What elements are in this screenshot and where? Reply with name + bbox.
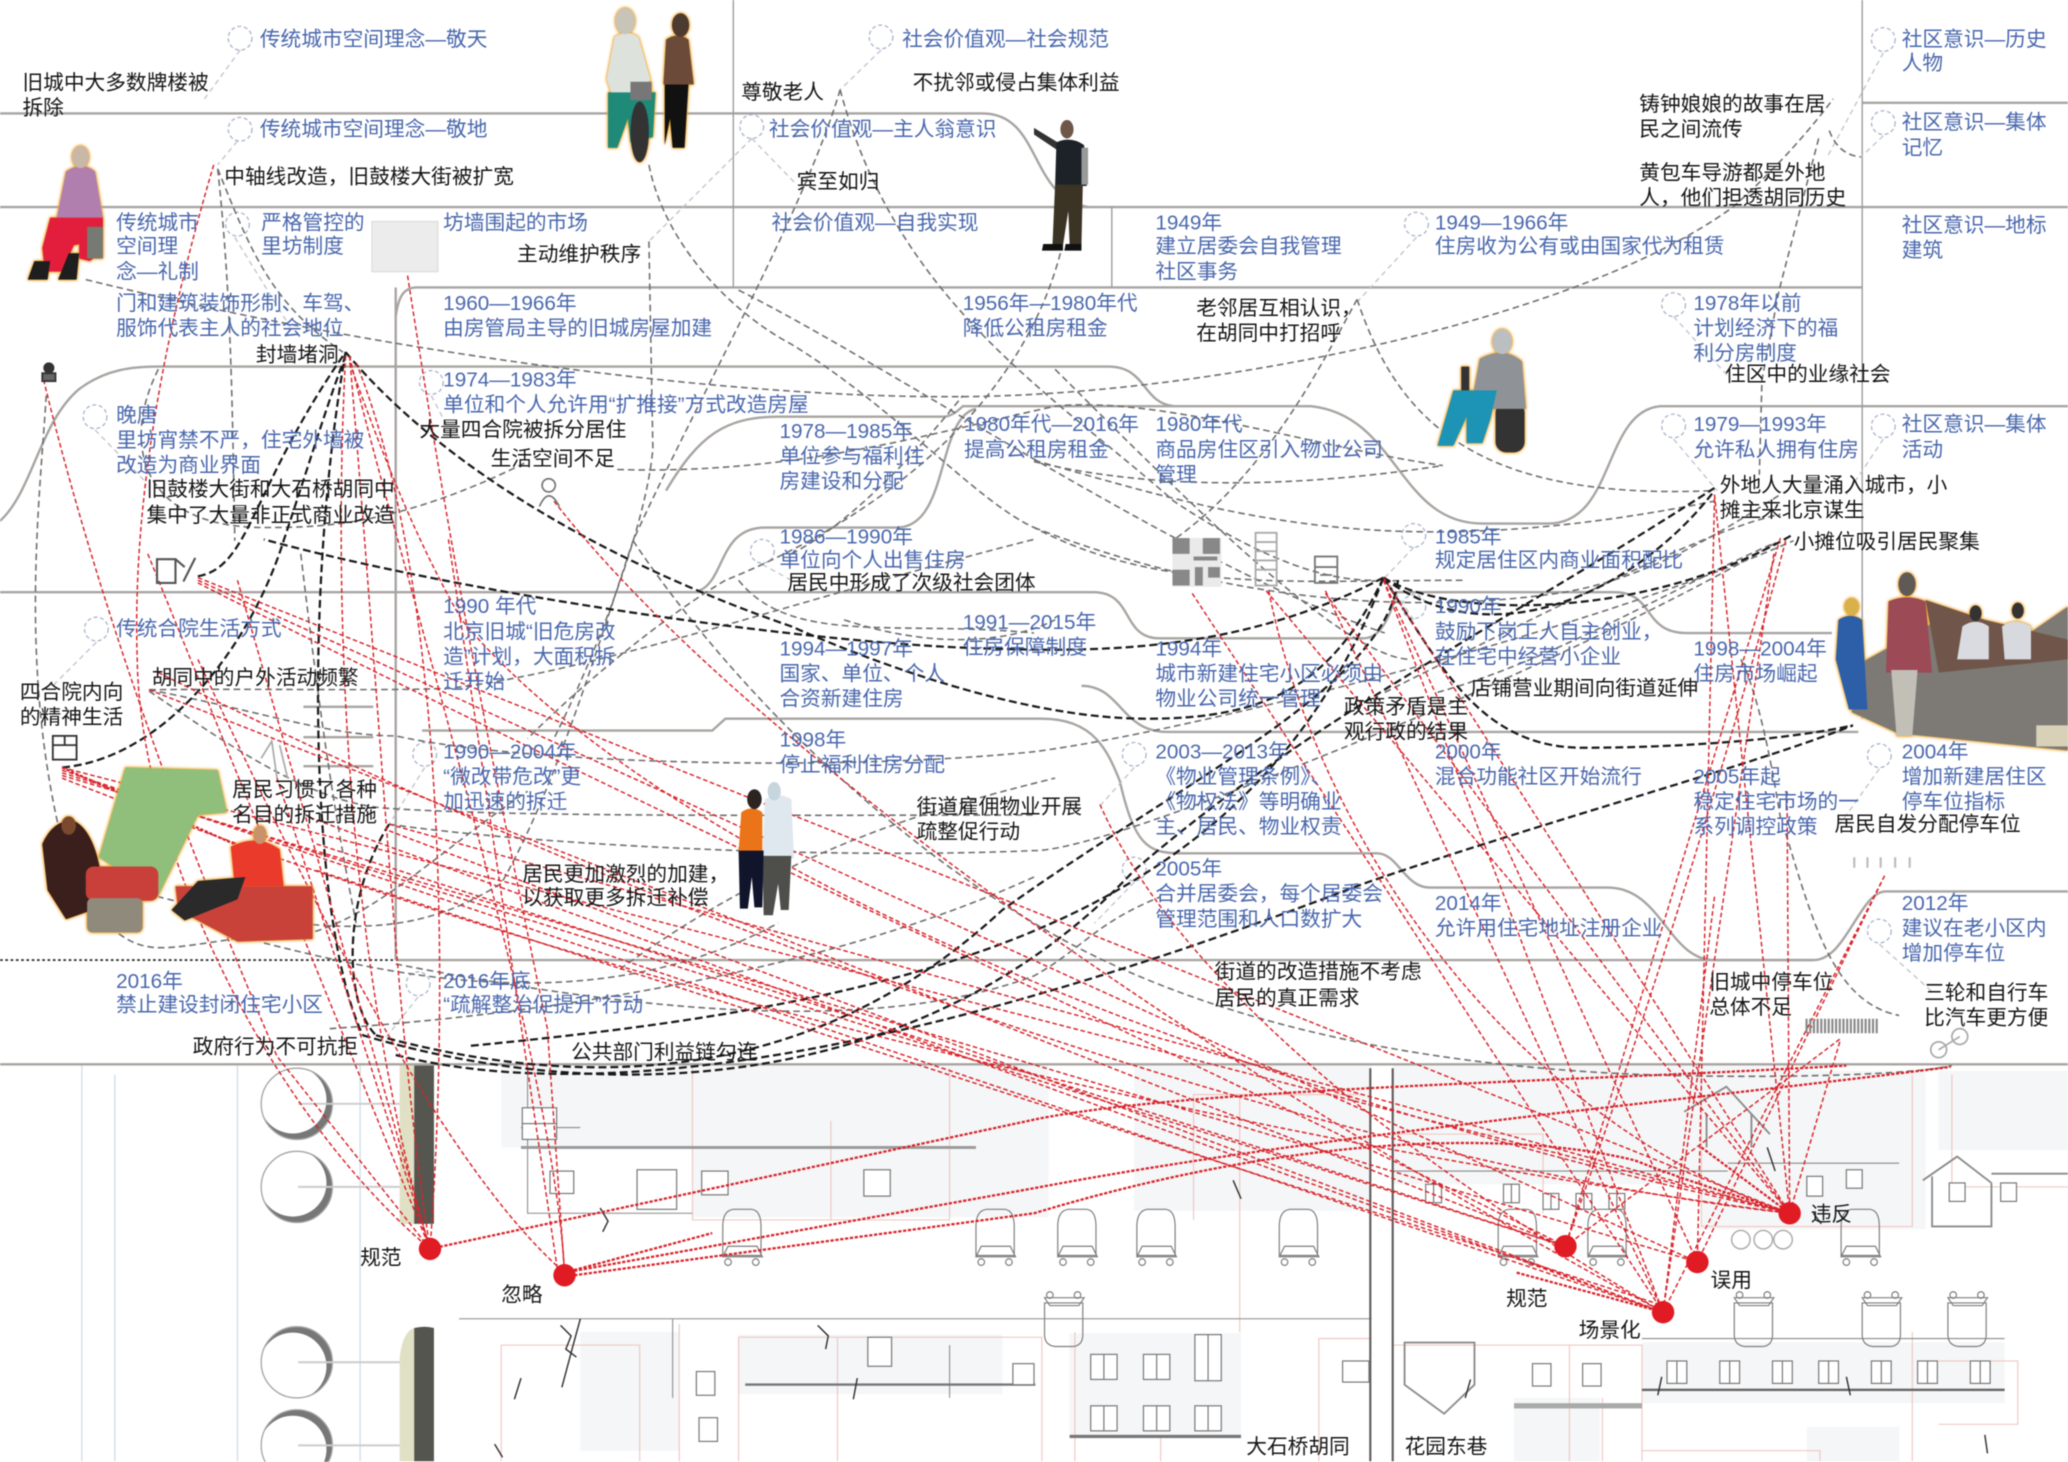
blue entry: 2003—2013年: 《物业管理条例》、 — [1155, 765, 1331, 788]
blue entry: 1980年代: 商品房住区引入物业公司 — [1155, 438, 1383, 461]
blue entry: 门和建筑装饰形制: 门和建筑装饰形制、车驾、 — [116, 292, 364, 315]
blue entry: 2003—2013年: 2003—2013年 — [1155, 740, 1289, 763]
blue entry: 1985年: 规定居住区内商业面积配比 — [1435, 549, 1683, 572]
note: 黄包车导游: 黄包车导游都是外地 — [1639, 161, 1826, 184]
blue entry: 1979—1993年: 1979—1993年 — [1693, 413, 1827, 436]
note: 拆迁措施: 居民习惯了各种 — [232, 779, 377, 802]
icon: faded wall rectangle — [372, 222, 438, 272]
icon: tick row — [1854, 857, 1910, 868]
blue entry: 2016年: 2016年 — [116, 970, 183, 993]
icon: document and pencil — [157, 558, 195, 583]
blue entry: 2012年: 建议在老小区内 — [1902, 917, 2047, 940]
blue entry: 社区意识—集体记忆: 社区意识—集体 — [1902, 111, 2047, 134]
blue entry: 1994年: 物业公司统一管理 — [1155, 688, 1321, 711]
blue entry: 1980年代: 管理 — [1155, 463, 1197, 486]
blue entry: 1990年: 鼓励下岗工人自主创业， — [1435, 620, 1662, 643]
photo: couple standing — [739, 782, 794, 915]
blue entry: 1990年代: 造”计划，大面积拆 — [443, 645, 616, 668]
note: 外地人涌入: 摊主来北京谋生 — [1720, 499, 1865, 522]
blue entry: 1974—1983年: 1974—1983年 — [443, 368, 577, 391]
blue entry: 晚唐: 改造为商业界面 — [116, 454, 261, 477]
note: 店铺延伸: 店铺营业期间向街道延伸 — [1471, 677, 1698, 700]
blue entry: 1990年代: 迁开始 — [443, 670, 506, 693]
blue entry: 晚唐: 里坊宵禁不严，住宅外墙被 — [116, 429, 364, 452]
blue entry: 传统城市空间理念—礼制: 传统城市 — [116, 211, 199, 234]
black dashed links — [62, 352, 1853, 1075]
blue entry: 门和建筑装饰形制: 服饰代表主人的社会地位 — [116, 317, 344, 340]
grey dashed links — [35, 90, 1952, 1076]
icon: QR code — [1172, 538, 1221, 587]
blue entry: 1994年: 城市新建住宅小区必须由 — [1155, 662, 1383, 685]
blue entry: 传统合院生活方式: 传统合院生活方式 — [116, 618, 282, 641]
blue entry: 社区意识—地标建筑: 建筑 — [1902, 239, 1943, 262]
blue entry: 社区意识—历史人物: 社区意识—历史 — [1902, 28, 2047, 51]
blue entry: 2003—2013年: 主、居民、物业权责 — [1155, 815, 1342, 838]
note: 生活空间不足: 生活空间不足 — [491, 448, 615, 471]
timeline lanes and dividers — [0, 0, 2068, 1064]
node label: 忽略: 忽略 — [501, 1284, 543, 1307]
note: 三轮和自行车: 比汽车更方便 — [1924, 1007, 2049, 1030]
blue entry: 1974—1983年: 单位和个人允许用“扩推接”方式改造房屋 — [443, 393, 809, 416]
blue entry: 2000年: 混合功能社区开始流行 — [1435, 765, 1642, 788]
blue entry: 社区意识—集体活动: 活动 — [1902, 438, 1943, 461]
blue entry: 社区意识—地标建筑: 社区意识—地标 — [1902, 214, 2047, 237]
blue entry: 2016年底: 2016年底 — [443, 970, 531, 993]
blue entry: 2004年: 2004年 — [1902, 740, 1968, 763]
panel: building elevation strip — [82, 1064, 2068, 1462]
red node: 规范 right — [1554, 1235, 1577, 1257]
house gables — [1405, 1087, 2068, 1414]
note: 街道雇佣物业: 街道雇佣物业开展 — [917, 796, 1082, 819]
blue entry: 1990年代: 1990 年代 — [443, 595, 537, 618]
icon: trees — [259, 1066, 415, 1462]
blue entry: 主人翁意识: 社会价值观—主人翁意识 — [769, 118, 997, 141]
note: 拆迁措施: 名目的拆迁措施 — [232, 804, 377, 827]
note: 停车位不足: 旧城中停车位 — [1709, 971, 1833, 994]
street label: 花园东巷: 花园东巷 — [1405, 1435, 1488, 1458]
blue entry: 1990年代: 北京旧城“旧危房改 — [443, 620, 616, 643]
note: 街道雇佣物业: 疏整促行动 — [917, 821, 1020, 844]
blue entry: 2004年: 增加新建居住区 — [1902, 765, 2047, 788]
red dashed links — [44, 165, 1951, 1312]
icon: small person — [539, 479, 559, 506]
blue entry: 2005年起: 稳定住宅市场的一 — [1693, 790, 1859, 813]
red node: 场景化 — [1652, 1301, 1674, 1323]
icon: vans lower row — [1045, 1292, 1987, 1346]
note: 停车位不足: 总体不足 — [1709, 996, 1792, 1019]
note: 封墙堵洞: 封墙堵洞 — [256, 343, 339, 366]
blue entry: 2000年: 2000年 — [1435, 740, 1502, 763]
red node: 规范 left — [419, 1238, 441, 1260]
photo: man in wheelchair — [1438, 329, 1526, 452]
blue entry: 2012年: 2012年 — [1902, 892, 1968, 915]
note: 非正式商业改造: 集中了大量非正式商业改造 — [146, 504, 395, 527]
icon: barcode — [1805, 1021, 1879, 1032]
red node: 忽略 — [553, 1264, 576, 1286]
icon: bicycle — [1931, 1029, 1968, 1058]
note: 中轴线改造: 中轴线改造，旧鼓楼大街被扩宽 — [224, 165, 514, 188]
blue entry: 1986—1990年: 单位向个人出售住房 — [779, 549, 966, 572]
street label: 大石桥胡同: 大石桥胡同 — [1246, 1435, 1350, 1458]
blue entry: 1960—1966年: 由房管局主导的旧城房屋加建 — [443, 317, 712, 340]
note: 非正式商业改造: 旧鼓楼大街和大石桥胡同中 — [146, 478, 395, 501]
blue entry: 1990年: 在住宅中经营小企业 — [1435, 645, 1621, 668]
blue entry: 1994—1997年: 合资新建住房 — [779, 688, 904, 711]
icon: window — [53, 736, 77, 760]
blue entry: 2005年起: 系列调控政策 — [1693, 815, 1818, 838]
blue entry: 传统城市空间理念—礼制: 念—礼制 — [116, 259, 199, 283]
icon: sign box — [1315, 557, 1337, 583]
blue entry: 1949年: 社区事务 — [1155, 260, 1238, 283]
node label: 场景化: 场景化 — [1579, 1319, 1641, 1342]
note: 三轮和自行车: 三轮和自行车 — [1924, 982, 2048, 1005]
icon: walker — [261, 741, 288, 778]
note: 小摊位: 小摊位吸引居民聚集 — [1794, 531, 1980, 554]
icon: vans upper row — [723, 1209, 1881, 1265]
blue entry: 1985年: 1985年 — [1435, 525, 1502, 548]
blue entry: 1956年—1980年代: 1956年—1980年代 — [963, 292, 1138, 315]
blue entry: 1998年: 停止福利住房分配 — [779, 753, 945, 776]
blue entry: 1998—2004年: 住房市场崛起 — [1693, 662, 1818, 685]
blue entry: 2004年: 停车位指标 — [1902, 790, 2005, 813]
note: 宾至如归: 宾至如归 — [797, 171, 879, 194]
note: 尊敬老人: 尊敬老人 — [741, 81, 824, 104]
blue entry: 1994—1997年: 国家、单位、个人 — [779, 662, 945, 685]
note: 次级社会团体: 居民中形成了次级社会团体 — [787, 571, 1036, 594]
note: 铸钟娘娘: 铸钟娘娘的故事在居 — [1639, 93, 1826, 116]
note: 老邻居: 在胡同中打招呼 — [1196, 322, 1341, 345]
blue entry: 1949—1966年: 1949—1966年 — [1435, 211, 1568, 234]
blue entry: 坊墙围起的市场: 坊墙围起的市场 — [443, 211, 588, 234]
blue entry: 1978年以前: 1978年以前 — [1693, 292, 1801, 315]
blue entry: 1991—2015年: 1991—2015年 — [963, 611, 1096, 634]
note: 外地人涌入: 外地人大量涌入城市，小 — [1720, 474, 1948, 497]
node label: 误用: 误用 — [1711, 1269, 1752, 1292]
blue entry: 1978—1985年: 单位参与福利住 — [779, 445, 924, 468]
photo: seated woman in pink — [28, 146, 103, 280]
blue entry: 1994年: 1994年 — [1155, 637, 1222, 660]
node label: 违反: 违反 — [1811, 1203, 1852, 1226]
blue entry: 社区意识—历史人物: 人物 — [1902, 52, 1943, 75]
blue entry: 1994—1997年: 1994—1997年 — [779, 637, 913, 660]
blue entry: 1949年: 建立居委会自我管理 — [1155, 235, 1342, 258]
blue entry: 严格管控的里坊制度: 里坊制度 — [261, 235, 344, 258]
icon: pedestrians and bikes — [495, 1147, 1987, 1457]
blue entry: 1978—1985年: 1978—1985年 — [779, 420, 913, 443]
note: 公共部门: 公共部门利益链勾连 — [571, 1041, 758, 1064]
photo: two elders with bicycle — [607, 8, 694, 162]
blue entry: 1990—2004年: 1990—2004年 — [443, 740, 577, 763]
blue entry: 传统城市空间理念—礼制: 空间理 — [116, 235, 178, 258]
note: 激烈加建: 以获取更多拆迁补偿 — [522, 887, 709, 910]
note: 精神生活: 四合院内向 — [20, 681, 123, 704]
note: 改造措施: 居民的真正需求 — [1215, 987, 1360, 1010]
blue entry: 1978—1985年: 房建设和分配 — [779, 470, 904, 493]
blue entry: 自我实现: 社会价值观—自我实现 — [772, 211, 978, 234]
blue entry: 1980年代: 1980年代 — [1155, 413, 1243, 436]
red node: 误用 — [1686, 1251, 1709, 1273]
dashed circle markers — [53, 25, 1932, 1042]
note: 改造措施: 街道的改造措施不考虑 — [1215, 961, 1422, 984]
blue entry: 2016年底: “疏解整治促提升”行动 — [443, 994, 643, 1017]
blue entry: 1990年: 1990年 — [1435, 595, 1502, 618]
blue entry: 社会规范: 社会价值观—社会规范 — [902, 28, 1109, 51]
node label: 规范 left: 规范 — [360, 1247, 401, 1270]
note: 激烈加建: 居民更加激烈的加建， — [522, 863, 729, 886]
note: 政策矛盾: 政策矛盾是主 — [1344, 695, 1468, 718]
blue entry: 1986—1990年: 1986—1990年 — [779, 525, 913, 548]
blue entry: 1980年代—2016年: 提高公租房租金 — [964, 438, 1109, 461]
note: 老邻居: 老邻居互相认识， — [1196, 297, 1362, 320]
note: 政府行为: 政府行为不可抗拒 — [193, 1036, 358, 1059]
blue entry: 1978年以前: 计划经济下的福 — [1693, 317, 1838, 340]
blue entry: 2012年: 增加停车位 — [1902, 942, 2005, 965]
note: 精神生活: 的精神生活 — [20, 706, 123, 729]
street dividers — [1370, 1068, 1393, 1461]
note: 政策矛盾: 观行政的结果 — [1344, 721, 1468, 744]
blue entry: 1956年—1980年代: 降低公租房租金 — [963, 317, 1108, 340]
blue entry: 1949年: 1949年 — [1155, 211, 1222, 234]
blue entry: 1978年以前: 利分房制度 — [1693, 342, 1797, 365]
blue entry: 1998年: 1998年 — [779, 728, 846, 751]
blue entry: 2014年: 2014年 — [1435, 892, 1502, 915]
note: 主动维护秩序: 主动维护秩序 — [517, 243, 641, 266]
photo: residents on red sofas with map — [42, 768, 313, 942]
blue entry: 晚唐: 晚唐 — [116, 404, 158, 427]
blue entry: 2016年: 禁止建设封闭住宅小区 — [116, 994, 323, 1017]
icon: lantern person — [42, 363, 55, 381]
blue entry: 1980年代—2016年: 1980年代—2016年 — [964, 413, 1139, 436]
red node: 违反 — [1778, 1202, 1801, 1224]
photo: man pointing — [1034, 120, 1088, 251]
note: 四合院被拆分: 大量四合院被拆分居住 — [419, 419, 626, 442]
photo: workers on site — [1836, 572, 2068, 750]
note: 业缘社会: 住区中的业缘社会 — [1725, 363, 1891, 386]
note: 牌楼被拆除: 拆除 — [22, 97, 64, 120]
blue entry: 1998—2004年: 1998—2004年 — [1693, 637, 1827, 660]
blue entry: 1949—1966年: 住房收为公有或由国家代为租赁 — [1435, 235, 1725, 258]
note: 牌楼被拆除: 旧城中大多数牌楼被 — [22, 72, 209, 95]
note: 自发分配停车位: 居民自发分配停车位 — [1834, 813, 2021, 836]
blue entry: 严格管控的里坊制度: 严格管控的 — [261, 211, 365, 234]
note: 铸钟娘娘: 民之间流传 — [1639, 118, 1743, 141]
blue entry: 1990—2004年: “微改带危改”更 — [443, 765, 581, 788]
windows — [522, 1108, 2016, 1441]
node label: 规范 right: 规范 — [1506, 1288, 1548, 1311]
blue entry: 社区意识—集体活动: 社区意识—集体 — [1902, 413, 2047, 436]
blue entry: 传统城市空间理念—敬天: 传统城市空间理念—敬天 — [260, 27, 487, 51]
blue entry: 1979—1993年: 允许私人拥有住房 — [1693, 438, 1859, 461]
note: 户外活动: 胡同中的户外活动频繁 — [152, 666, 359, 689]
blue entry: 1991—2015年: 住房保障制度 — [963, 636, 1087, 659]
icon: ladder — [1256, 533, 1277, 586]
blue entry: 社区意识—集体记忆: 记忆 — [1902, 136, 1943, 159]
blue entry: 2005年起: 2005年起 — [1693, 765, 1781, 788]
dark wall strips — [400, 1066, 434, 1461]
blue entry: 2005年: 合并居委会，每个居委会 — [1155, 883, 1383, 906]
blue entry: 2005年: 管理范围和人口数扩大 — [1155, 908, 1362, 931]
blue entry: 2003—2013年: 《物权法》等明确业 — [1155, 790, 1342, 813]
blue entry: 2005年: 2005年 — [1155, 858, 1222, 881]
blue entry: 2014年: 允许用住宅地址注册企业 — [1435, 917, 1662, 940]
blue entry: 1990—2004年: 加迅速的拆迁 — [443, 790, 567, 813]
note: 不扰邻: 不扰邻或侵占集体利益 — [913, 72, 1120, 95]
blue entry: 1960—1966年: 1960—1966年 — [443, 292, 577, 315]
blue entry: 传统城市空间理念—敬地: 传统城市空间理念—敬地 — [260, 117, 487, 141]
note: 黄包车导游: 人，他们担透胡同历史 — [1639, 186, 1846, 209]
